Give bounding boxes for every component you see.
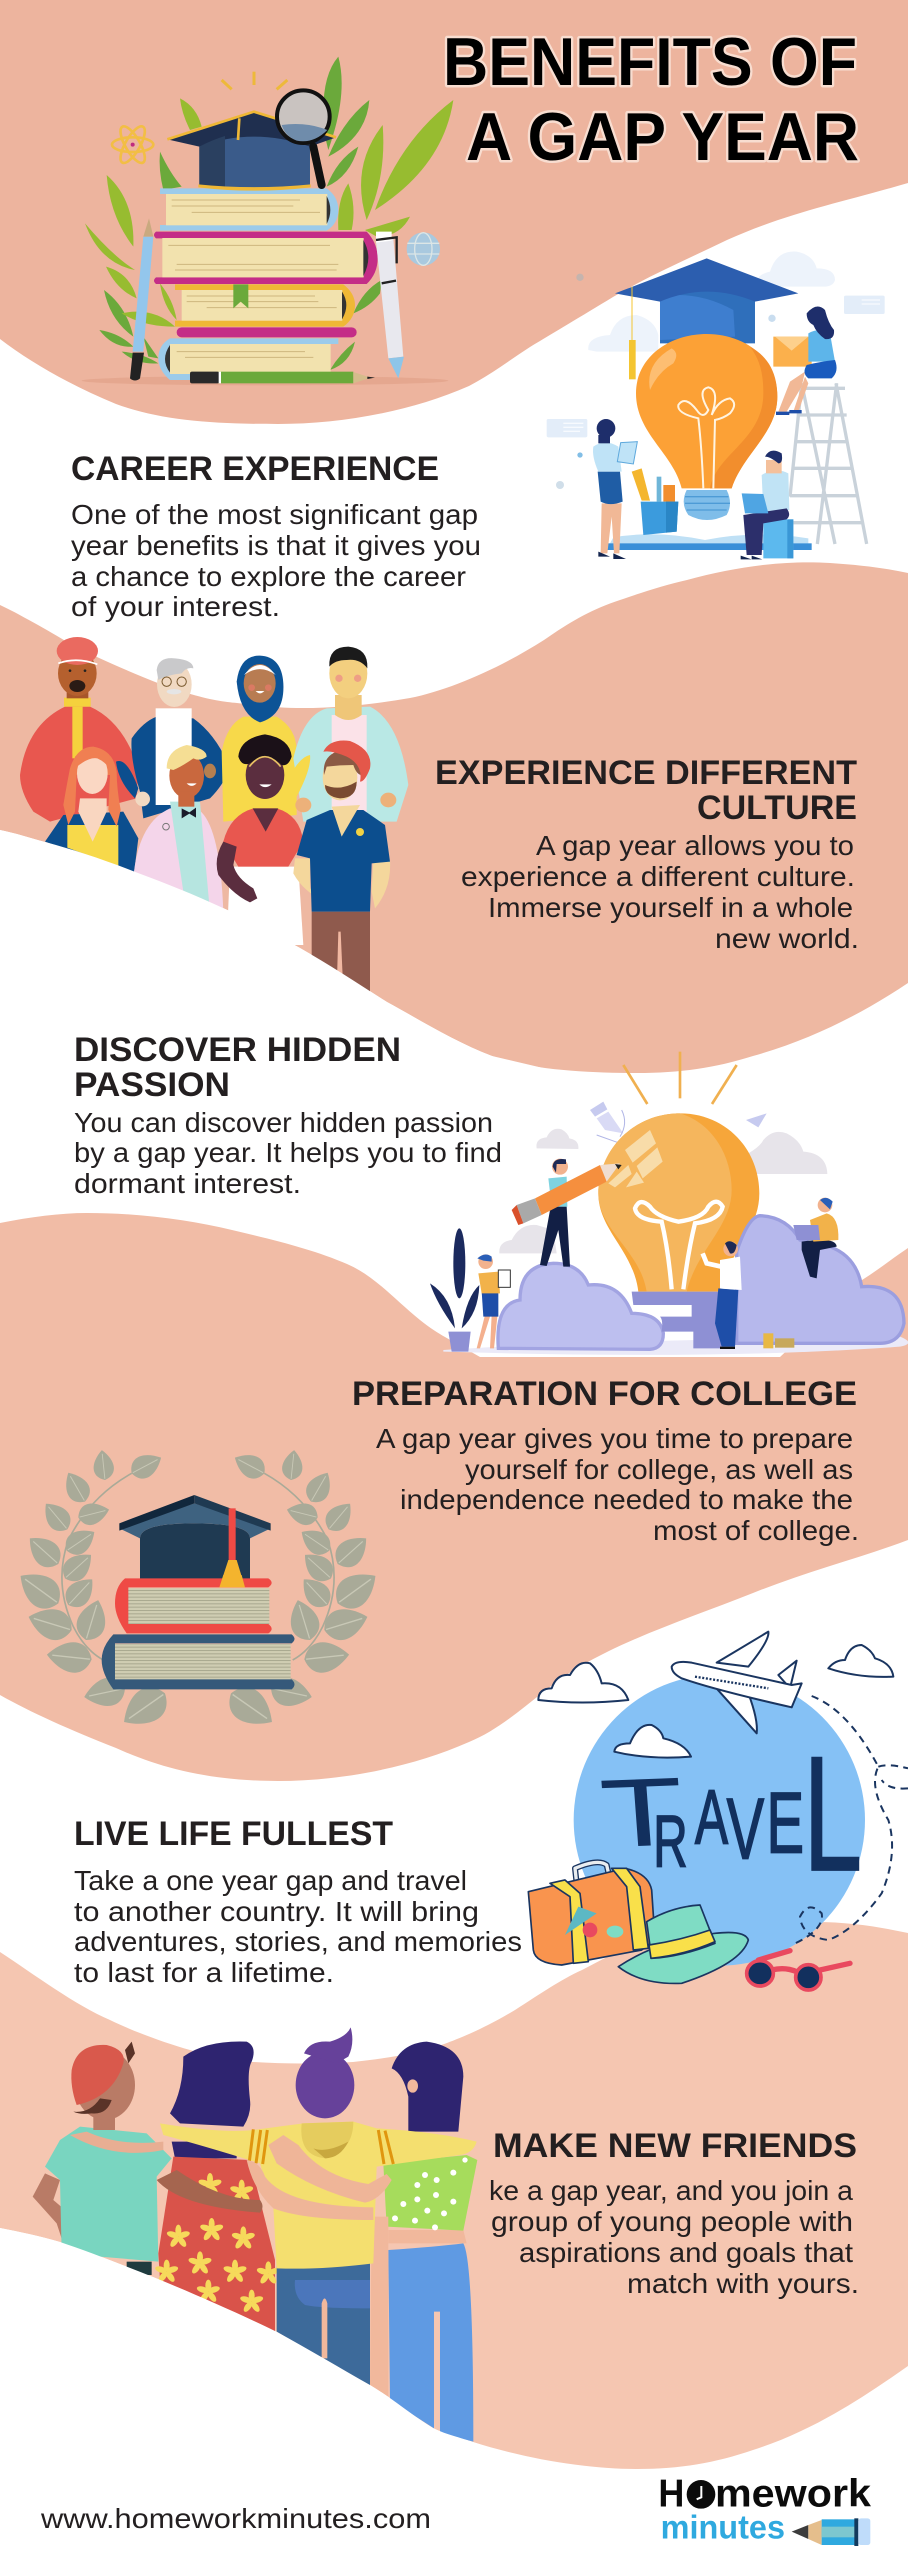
background blob: culture — [0, 562, 908, 1073]
icon: laurel wreath right — [221, 1448, 385, 1736]
illustration: lightbulb career scene — [547, 252, 885, 559]
icon: graduation cap — [167, 112, 336, 191]
friend arms across back — [247, 2135, 392, 2220]
heading text: CULTURE — [697, 789, 857, 827]
footer website url: www.homeworkminutes.com — [40, 2503, 431, 2534]
rays — [623, 1052, 737, 1104]
icon: globe — [407, 232, 440, 266]
heading text: PREPARATION FOR COLLEGE — [352, 1375, 857, 1413]
heading text — [435, 754, 857, 827]
globe circle — [574, 1674, 865, 1966]
title line 1: BENEFITS OF — [443, 24, 857, 100]
person: woman in red top — [217, 734, 303, 945]
heading text: DISCOVER HIDDEN — [74, 1031, 401, 1069]
cloud: right — [737, 1216, 904, 1343]
icon: white pen — [376, 232, 404, 378]
body text: ke a gap year, and you join a — [489, 2175, 853, 2206]
heading text: CAREER EXPERIENCE — [71, 450, 439, 488]
body text — [489, 2175, 859, 2299]
icon: potted plant — [430, 1228, 479, 1352]
travel lettering: E — [767, 1776, 804, 1872]
icon: blue pen — [130, 218, 153, 380]
person: bearded man in beret — [293, 741, 390, 992]
section: experience different culture — [435, 754, 859, 954]
illustration: travel scene — [528, 1632, 908, 1990]
icon: blue book — [102, 1634, 294, 1689]
person: blond man with bow tie — [134, 745, 223, 912]
body text — [71, 499, 481, 622]
body text: Immerse yourself in a whole — [488, 892, 853, 923]
icon: lightbulb — [636, 334, 777, 520]
icon: sun hat — [618, 1905, 748, 1983]
body text: independence needed to make the — [400, 1484, 853, 1515]
title line 2: A GAP YEAR — [466, 99, 859, 175]
person: man with hammer — [703, 1241, 742, 1349]
friend 1: teal shirt and red beret — [33, 2042, 172, 2275]
travel lettering: V — [727, 1782, 764, 1878]
person: woman with clipboard — [593, 419, 637, 559]
white wave mask over friends — [0, 2228, 520, 2560]
ground shadow — [443, 1337, 908, 1355]
travel lettering: A — [695, 1773, 728, 1860]
friend 3: purple hair and yellow shirt — [160, 2027, 477, 2387]
pale clouds — [499, 1129, 827, 1253]
body text: A gap year allows you to — [536, 830, 854, 861]
body text: new world. — [715, 923, 859, 954]
section: preparation for college — [352, 1375, 859, 1546]
open book — [605, 534, 812, 550]
heading text — [74, 1031, 401, 1104]
icon: pencil — [792, 2518, 870, 2546]
icon: leaves — [85, 57, 453, 370]
body text: adventures, stories, and memories — [74, 1926, 522, 1957]
travel lettering: L — [803, 1723, 862, 1906]
icon: graduation cap — [119, 1495, 271, 1587]
icon: rays — [222, 72, 287, 89]
heading text: PASSION — [74, 1066, 230, 1104]
heading text: MAKE NEW FRIENDS — [493, 2127, 857, 2165]
logo subtitle: minutes — [661, 2509, 785, 2546]
body text: One of the most significant gap — [71, 499, 478, 530]
icon: lightbulb — [598, 1113, 759, 1292]
clouds — [538, 1645, 893, 1758]
bulb base — [632, 1292, 722, 1348]
body text: most of college. — [653, 1515, 859, 1546]
heading text: LIVE LIFE FULLEST — [74, 1815, 393, 1853]
body text: aspirations and goals that — [519, 2237, 853, 2268]
icon: atom — [112, 123, 153, 166]
dashed flight path — [792, 1696, 908, 1945]
person: sitting man with laptop — [793, 1198, 838, 1278]
body text: group of young people with — [491, 2206, 853, 2237]
person: woman with clipboard — [477, 1254, 510, 1348]
body text: a chance to explore the career — [71, 561, 466, 592]
body text: yourself for college, as well as — [465, 1454, 853, 1485]
icon: sunglasses — [747, 1951, 850, 1990]
body text — [376, 1423, 859, 1546]
ladder — [790, 383, 867, 544]
body text: A gap year gives you time to prepare — [376, 1423, 853, 1454]
person: woman on ladder — [773, 307, 837, 415]
logo: homework minutes — [658, 2472, 871, 2546]
background blob: top — [0, 0, 908, 424]
section: discover hidden passion — [74, 1031, 502, 1199]
body text — [461, 830, 859, 954]
person: old man — [116, 658, 230, 818]
icon: paint rolls — [763, 1333, 794, 1348]
icon: paper plane — [746, 1113, 767, 1127]
icon: green pencil — [190, 372, 375, 383]
icon: red book — [115, 1575, 272, 1633]
person: man with open jacket — [288, 647, 408, 822]
body text: of your interest. — [71, 591, 280, 622]
friend 1 arm around waist — [157, 2170, 262, 2213]
logo wordmark — [658, 2472, 871, 2516]
pencil cup — [632, 468, 678, 535]
icon: laurel wreath left — [11, 1448, 175, 1736]
icon: suitcase — [528, 1862, 655, 1965]
body text: Take a one year gap and travel — [74, 1865, 467, 1896]
travel lettering — [597, 1723, 862, 1906]
person: man with laptop — [741, 451, 793, 559]
icon: pen nib — [590, 1102, 625, 1143]
body text: to another country. It will bring — [74, 1896, 479, 1927]
body text: You can discover hidden passion — [74, 1107, 493, 1138]
icon: airplane — [672, 1632, 802, 1733]
icon: large pencil and man — [512, 1159, 622, 1267]
body text — [74, 1865, 522, 1988]
illustration: books, graduation cap and plants — [82, 57, 453, 385]
person: woman with hijab — [222, 656, 297, 822]
body text: to last for a lifetime. — [74, 1957, 334, 1988]
friend 4: long hair and green polka-dot top — [370, 2042, 477, 2442]
white wave mask over people — [0, 830, 560, 1200]
illustration: lightbulb idea scene — [430, 1052, 908, 1355]
logo wordmark: H — [658, 2472, 684, 2516]
logo wordmark: mework — [715, 2472, 871, 2516]
body text: year benefits is that it gives you — [71, 530, 481, 561]
travel lettering: R — [653, 1801, 688, 1883]
illustration: laurel wreath with cap and books — [11, 1448, 385, 1736]
person: red-haired woman — [45, 747, 138, 873]
illustration: four friends from behind — [33, 2027, 477, 2442]
body text: dormant interest. — [74, 1168, 301, 1199]
heading text: EXPERIENCE DIFFERENT — [435, 754, 857, 792]
heading: career experience — [71, 450, 481, 622]
person: man with turban — [20, 637, 138, 822]
section: make new friends — [489, 2127, 859, 2299]
body text: match with yours. — [627, 2268, 859, 2299]
cloud: left — [498, 1263, 663, 1349]
pale clouds and cards — [547, 252, 885, 489]
background blob: friends — [0, 1922, 908, 2469]
title — [443, 24, 859, 175]
body text: experience a different culture. — [461, 861, 855, 892]
icon: magnifying glass — [277, 90, 330, 185]
icon: clock — [687, 2480, 715, 2509]
book stack — [154, 188, 378, 380]
friend 2: navy hair and floral dress — [154, 2042, 281, 2332]
illustration: diverse group of people — [20, 637, 408, 992]
icon: graduation cap — [615, 258, 798, 379]
body text: by a gap year. It helps you to find — [74, 1137, 502, 1168]
travel lettering: T — [597, 1757, 687, 1868]
body text — [74, 1107, 502, 1199]
background blob: college — [0, 1213, 908, 1781]
section: live life fullest — [74, 1815, 522, 1988]
